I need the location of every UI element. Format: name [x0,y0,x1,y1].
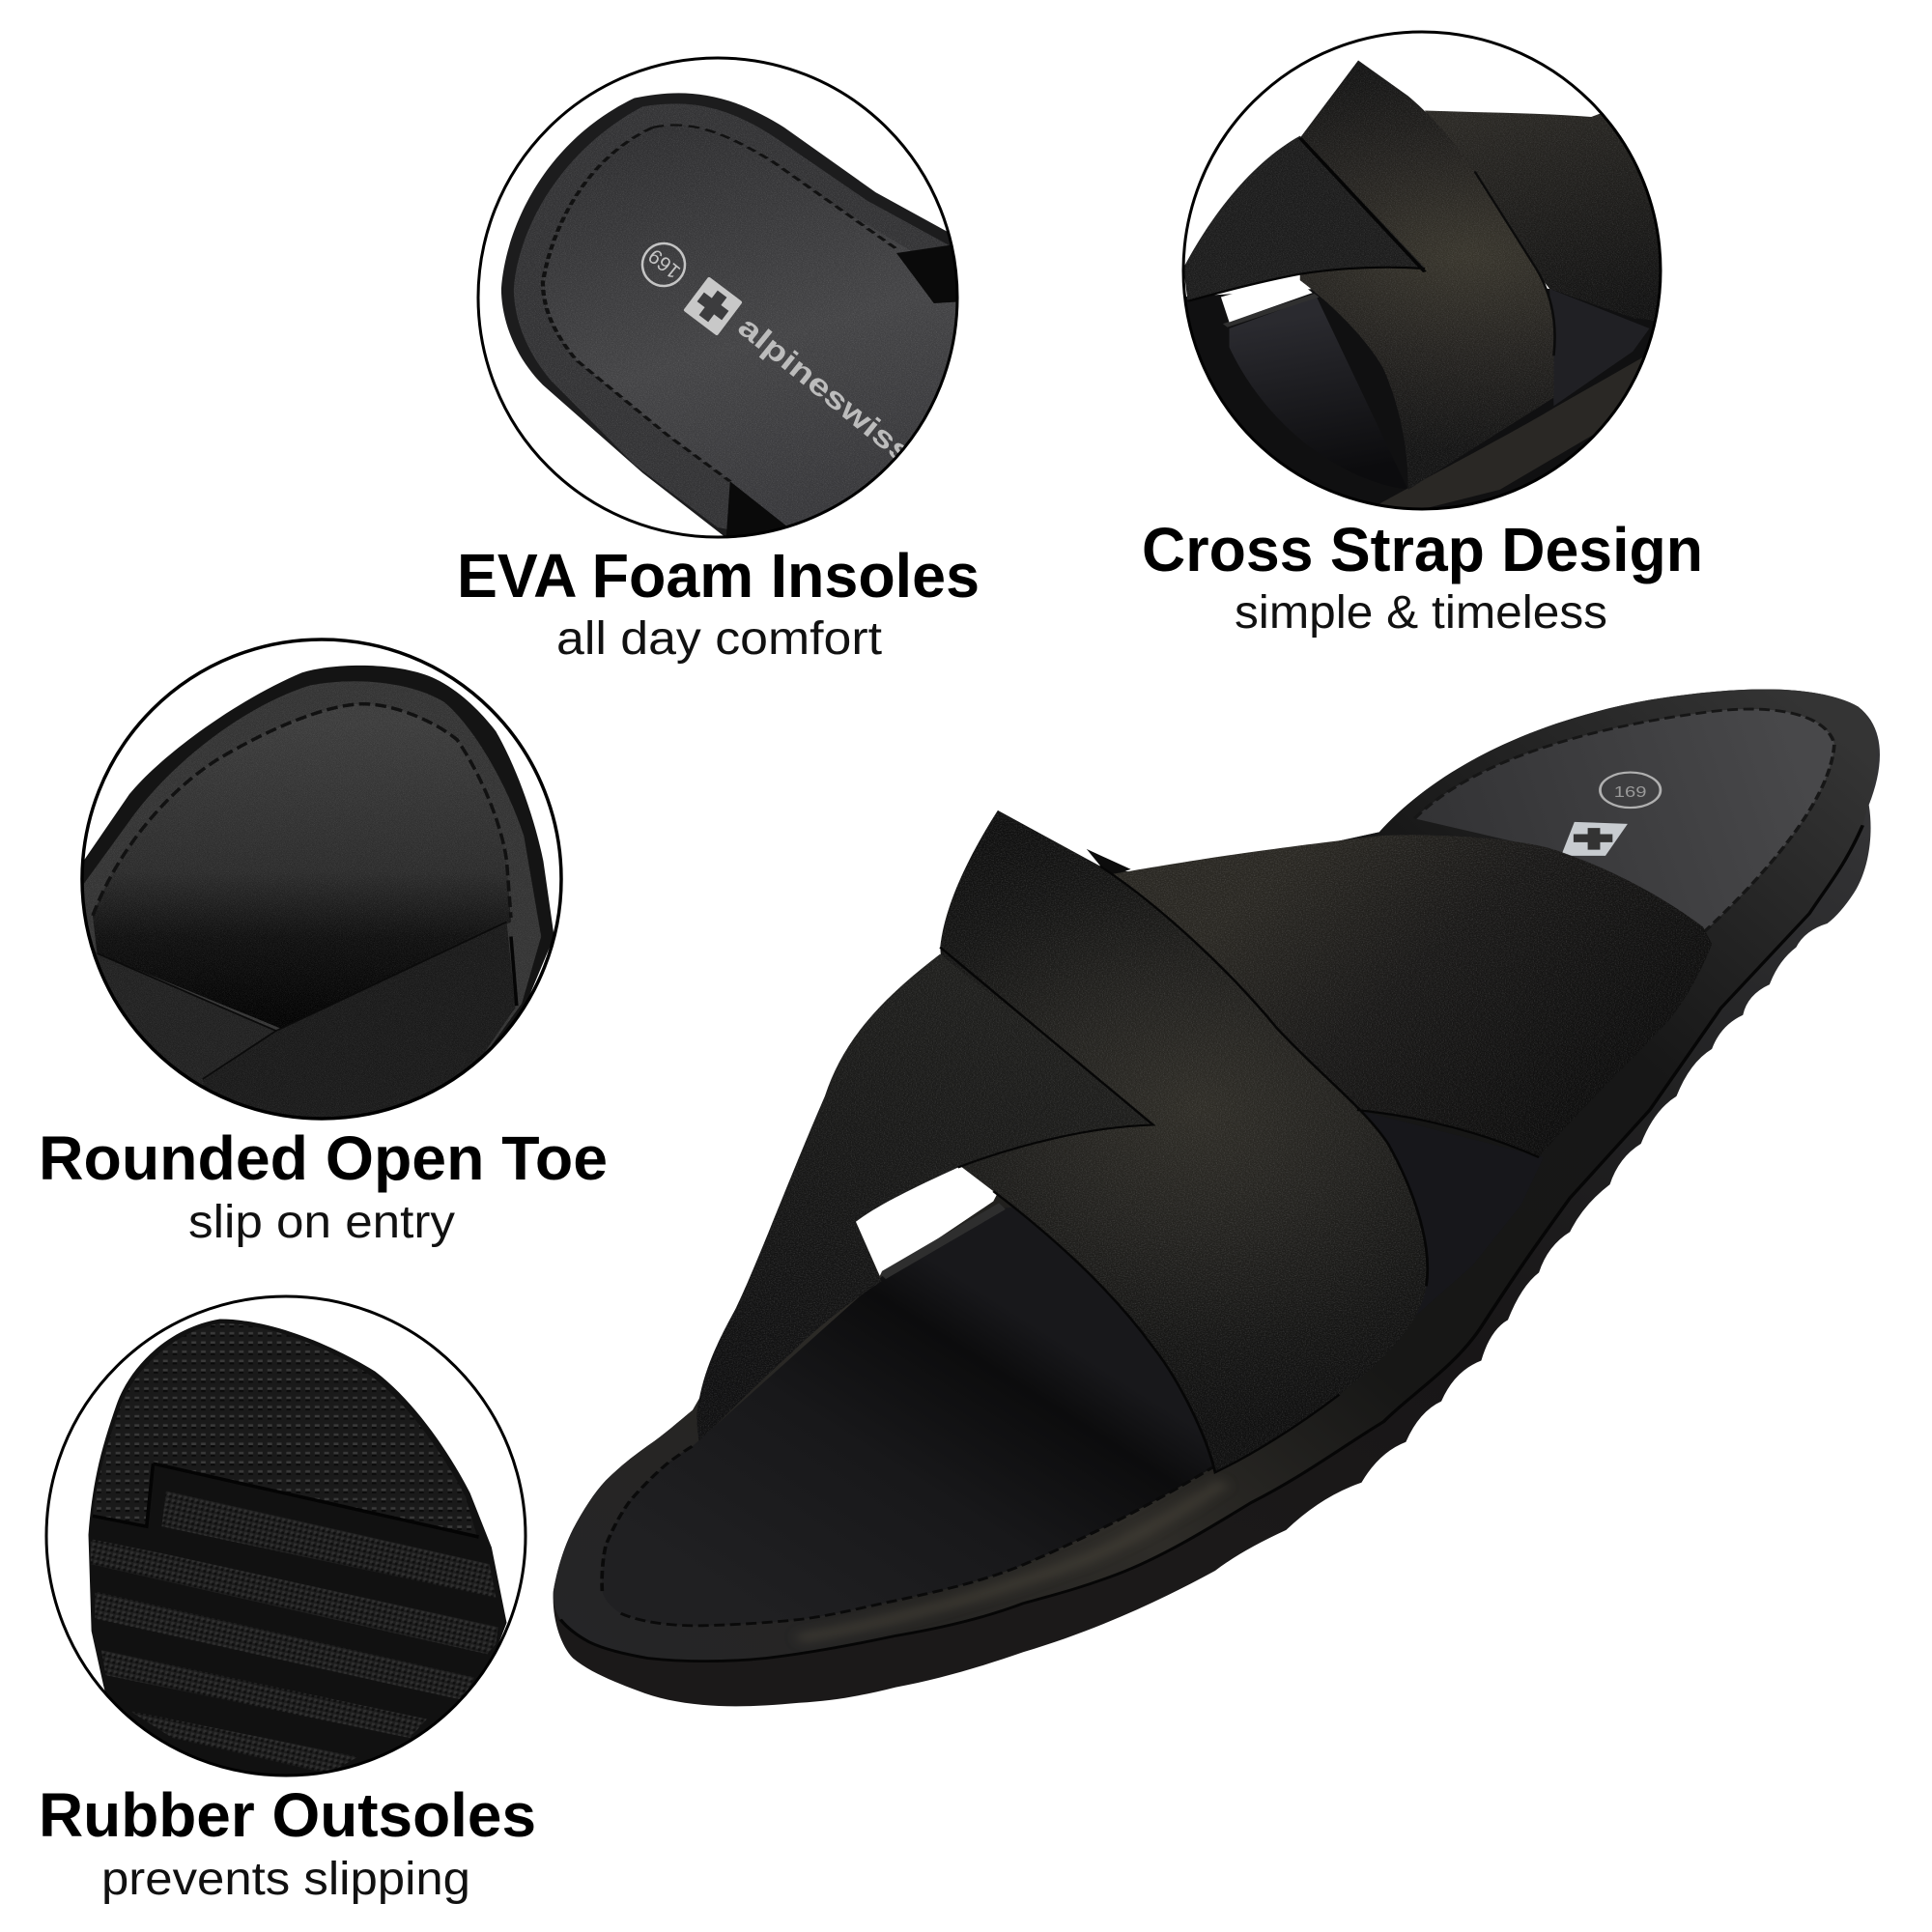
heading: EVA Foam Insoles: EVA Foam Insoles [457,541,980,611]
panel: rounded open toe [39,633,608,1248]
ring: circle outline [82,639,561,1119]
stitch lines [602,1168,1530,1626]
subheading: all day comfort: all day comfort [556,613,882,665]
panel: EVA foam insoles [457,53,980,665]
subheading: simple & timeless: simple & timeless [1235,587,1607,639]
heel insole [1415,709,1834,937]
panel: rubber outsoles [39,1294,536,1905]
image: cross strap close-up [1184,60,1660,508]
image: outsole close-up [89,1320,506,1774]
main image: black cross strap sandal [554,690,1880,1706]
subheading: slip on entry: slip on entry [188,1197,455,1248]
image: toe close-up [83,665,554,1117]
logo: ring mark: 169 [644,244,685,283]
logo: brand wordmark: alpineswiss [732,309,920,470]
left strap [696,954,1153,1441]
strap shadow on insole [1357,1110,1544,1317]
logo: swiss cross [683,276,743,336]
ring: circle outline [46,1296,526,1776]
ring: circle outline [1183,32,1661,509]
heel logo cross [1561,822,1628,856]
window gap [856,1171,993,1276]
image: insole close-up [500,93,956,535]
foxing rim [554,690,1876,1662]
subheading: prevents slipping: prevents slipping [101,1854,470,1905]
strap edge lines [940,866,1539,1472]
small rear strap sliver [1087,849,1131,876]
main image: black cross strap sandal: 169 [1614,783,1647,800]
rim highlight [798,1483,1224,1638]
right strap [1100,835,1712,1157]
heading: Rubber Outsoles: Rubber Outsoles [39,1780,536,1850]
heading: Rounded Open Toe: Rounded Open Toe [39,1123,608,1193]
cross-over strap [940,810,1428,1472]
panel: cross strap design [1142,29,1703,639]
insole rim by window [883,1207,1003,1276]
foxing line [560,825,1862,1662]
heading: Cross Strap Design: Cross Strap Design [1142,515,1703,584]
ring: circle outline [478,58,957,537]
heel logo ring [1600,773,1661,808]
outsole [554,690,1880,1706]
front insole [602,1168,1530,1626]
